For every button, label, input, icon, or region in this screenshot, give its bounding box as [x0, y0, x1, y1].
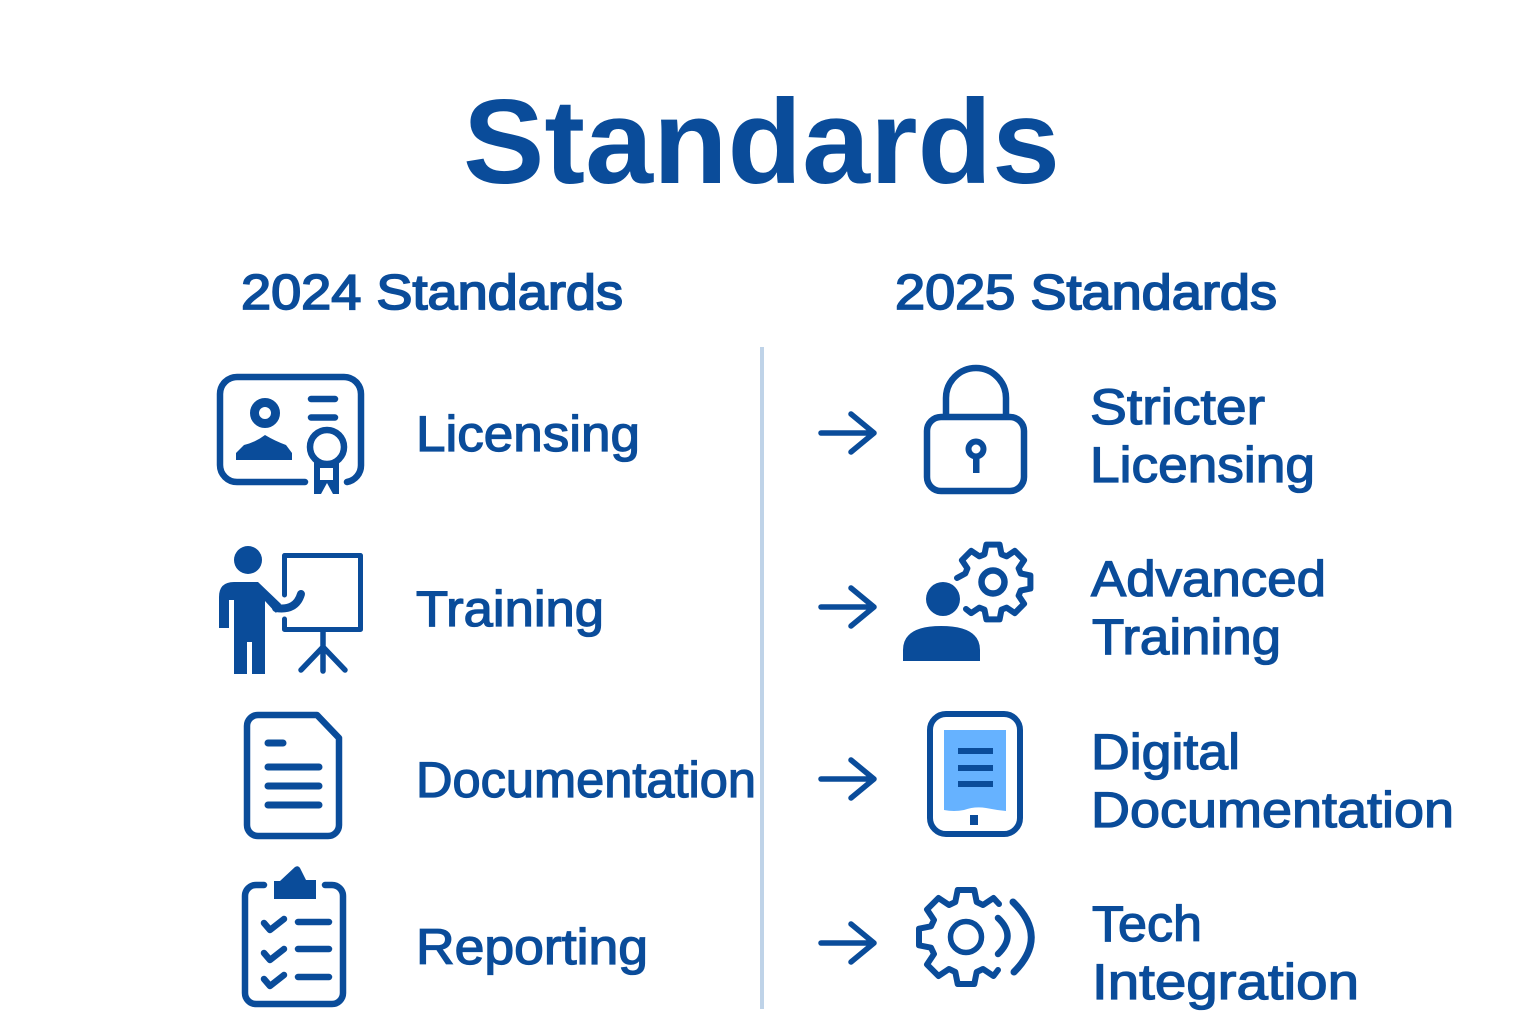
label: tech integration: Tech	[1092, 896, 1202, 952]
title: Standards	[463, 75, 1060, 209]
label: reporting: Reporting	[416, 919, 648, 975]
arrow: training	[821, 588, 874, 626]
label: training: Training	[416, 581, 604, 637]
label: digital documentation	[1091, 724, 1454, 838]
icon: gear with signal arcs	[919, 890, 1031, 984]
label: advanced training: Training	[1092, 609, 1281, 665]
heading: 2025 standards: 2025 Standards	[895, 266, 1277, 320]
label: digital documentation: Digital	[1091, 724, 1240, 780]
icon: document	[247, 715, 339, 836]
arrow: licensing	[821, 414, 874, 452]
label: advanced training	[1091, 551, 1326, 665]
label: tech integration: Integration	[1092, 954, 1359, 1010]
arrow: documentation	[821, 760, 874, 798]
label: documentation: Documentation	[416, 752, 756, 808]
icon: tablet with document	[930, 714, 1020, 834]
heading: 2024 standards: 2024 Standards	[241, 266, 623, 320]
label: stricter licensing: Licensing	[1090, 437, 1315, 493]
label: stricter licensing	[1090, 379, 1315, 493]
icon: checklist clipboard	[245, 866, 343, 1004]
label: tech integration	[1092, 896, 1359, 1010]
label: digital documentation: Documentation	[1091, 782, 1454, 838]
label: advanced training: Advanced	[1091, 551, 1326, 607]
icon: trainer at board	[219, 546, 360, 674]
icon: person with gear	[903, 545, 1030, 661]
icon: padlock	[927, 368, 1024, 491]
arrow: reporting	[821, 924, 874, 962]
icon: licence certificate	[220, 377, 361, 494]
label: stricter licensing: Stricter	[1090, 379, 1265, 435]
label: licensing: Licensing	[416, 406, 640, 462]
